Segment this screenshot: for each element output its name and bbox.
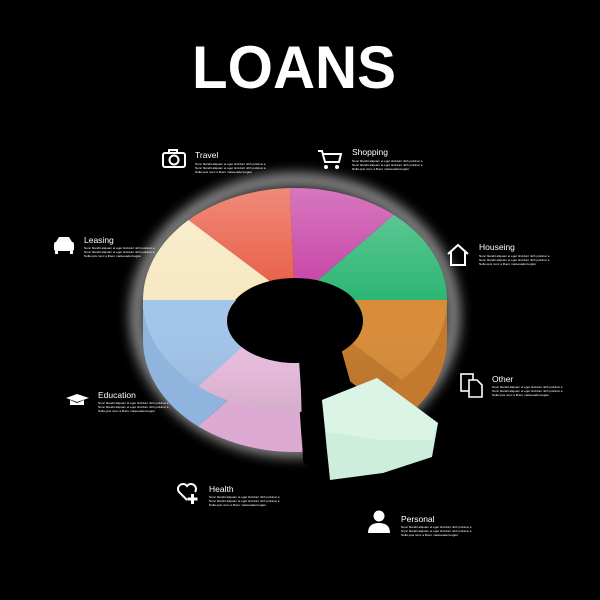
icon: documents <box>461 374 482 397</box>
item: education: Nulla quis nunc a libero malesuada feugiat <box>98 409 155 413</box>
item: other: Other <box>492 374 513 384</box>
item: shopping: Nulla quis nunc a libero malesuada feugiat <box>352 167 409 171</box>
item: shopping <box>318 147 423 171</box>
item: health: Health <box>209 484 234 494</box>
item: education <box>66 390 169 413</box>
item: health: Nulla quis nunc a libero malesuada feugiat <box>209 503 266 507</box>
item: personal: Nulla quis nunc a libero malesuada feugiat <box>401 533 458 537</box>
icon: house <box>448 245 468 265</box>
item: leasing <box>54 235 155 258</box>
item: travel <box>163 150 266 174</box>
item: leasing: Nunc blandit aliquam et eget tincidunt nibh pulvinar a <box>84 246 155 250</box>
item: houseing: Nulla quis nunc a libero malesuada feugiat <box>479 262 536 266</box>
item: other: Nunc blandit aliquam et eget tincidunt nibh pulvinar a <box>492 389 563 393</box>
item: leasing: Leasing <box>84 235 114 245</box>
item: travel: Nunc blandit aliquam et eget tincidunt nibh pulvinar a <box>195 166 266 170</box>
item: shopping: Nunc blandit aliquam et eget tincidunt nibh pulvinar a <box>352 159 423 163</box>
icon: heart plus <box>178 484 198 504</box>
icon: camera <box>163 150 185 167</box>
item: personal <box>368 510 472 537</box>
item: houseing <box>448 242 550 266</box>
hole <box>227 279 363 363</box>
donut chart <box>121 164 469 480</box>
item: personal: Nunc blandit aliquam et eget tincidunt nibh pulvinar a <box>401 525 472 529</box>
item: travel: Nulla quis nunc a libero malesuada feugiat <box>195 170 252 174</box>
personal wedge <box>322 378 438 480</box>
item: houseing: Houseing <box>479 242 515 252</box>
item: other <box>461 374 563 397</box>
item: travel: Travel <box>195 150 218 160</box>
item: education: Education <box>98 390 136 400</box>
item: personal: Personal <box>401 514 435 524</box>
item: travel: Nunc blandit aliquam et eget tincidunt nibh pulvinar a <box>195 162 266 166</box>
item: houseing: Nunc blandit aliquam et eget tincidunt nibh pulvinar a <box>479 254 550 258</box>
item: health <box>178 484 280 507</box>
item: shopping: Nunc blandit aliquam et eget tincidunt nibh pulvinar a <box>352 163 423 167</box>
item: personal: Nunc blandit aliquam et eget tincidunt nibh pulvinar a <box>401 529 472 533</box>
gap cut <box>300 345 352 482</box>
item: leasing: Nulla quis nunc a libero malesuada feugiat <box>84 254 141 258</box>
item: health: Nunc blandit aliquam et eget tincidunt nibh pulvinar a <box>209 499 280 503</box>
item: other: Nunc blandit aliquam et eget tincidunt nibh pulvinar a <box>492 385 563 389</box>
item: other: Nulla quis nunc a libero malesuada feugiat <box>492 393 549 397</box>
item: houseing: Nunc blandit aliquam et eget tincidunt nibh pulvinar a <box>479 258 550 262</box>
item: education: Nunc blandit aliquam et eget tincidunt nibh pulvinar a <box>98 401 169 405</box>
item: health: Nunc blandit aliquam et eget tincidunt nibh pulvinar a <box>209 495 280 499</box>
item: education: Nunc blandit aliquam et eget tincidunt nibh pulvinar a <box>98 405 169 409</box>
item: shopping: Shopping <box>352 147 388 157</box>
item: leasing: Nunc blandit aliquam et eget tincidunt nibh pulvinar a <box>84 250 155 254</box>
icon: cart <box>318 151 341 169</box>
icon: car <box>54 237 74 254</box>
title: LOANS <box>192 34 396 101</box>
icon: graduation cap <box>66 394 89 405</box>
icon: person <box>368 510 390 533</box>
